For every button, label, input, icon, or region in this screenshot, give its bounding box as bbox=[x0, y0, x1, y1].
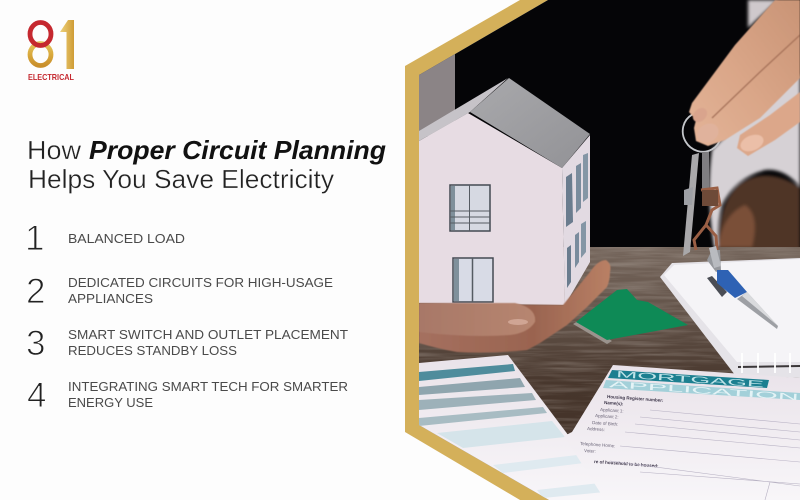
mortgage application form: MORTGAGE bbox=[616, 369, 764, 389]
list item 3: 3 bbox=[26, 324, 45, 363]
list item 2 bbox=[26, 272, 333, 311]
wooden table bbox=[419, 247, 800, 500]
list item 3 bbox=[26, 324, 348, 363]
heading: Helps You Save Electricity bbox=[28, 164, 334, 194]
heading bbox=[27, 135, 386, 194]
list item 1: 1 bbox=[25, 219, 44, 258]
white sleeve at right bbox=[709, 0, 800, 250]
mortgage application form: Date of Birth: bbox=[592, 420, 618, 427]
pen bbox=[707, 250, 778, 329]
key ring and keys bbox=[682, 114, 722, 268]
list item 2: 2 bbox=[26, 272, 45, 311]
house front wall bbox=[419, 113, 565, 305]
heading: How bbox=[27, 135, 81, 165]
mortgage application form bbox=[564, 365, 800, 500]
mortgage application form: Address: bbox=[587, 426, 605, 432]
logo: 81 Electrical: ELECTRICAL bbox=[28, 72, 74, 82]
mortgage application form: Housing Register number: bbox=[607, 394, 664, 403]
list item 1: BALANCED LOAD bbox=[68, 231, 185, 246]
mortgage application form: Name(s): bbox=[604, 400, 624, 406]
mortgage application form: Telephone Home: bbox=[580, 441, 615, 448]
front upper window bbox=[450, 185, 490, 231]
wood grain texture bbox=[419, 247, 800, 437]
thumbnail bbox=[508, 319, 528, 325]
house side wall bbox=[562, 135, 590, 305]
list item 2: APPLIANCES bbox=[68, 291, 153, 306]
blurred grey block at left bbox=[419, 50, 455, 136]
mortgage application form: re of household to be housed: bbox=[594, 459, 659, 469]
gold hexagon frame bbox=[405, 0, 549, 500]
roof left bbox=[419, 78, 508, 141]
list item 4: ENERGY USE bbox=[68, 395, 153, 410]
list item 1 bbox=[25, 219, 185, 258]
list item 4: 4 bbox=[27, 376, 46, 415]
list item 4: INTEGRATING SMART TECH FOR SMARTER bbox=[68, 379, 348, 394]
mortgage application form: APPLICATION bbox=[609, 379, 799, 402]
side windows bbox=[566, 153, 588, 288]
front lower window bbox=[453, 258, 493, 302]
list item 3: SMART SWITCH AND OUTLET PLACEMENT bbox=[68, 327, 348, 342]
list item 3: REDUCES STANDBY LOSS bbox=[68, 343, 237, 358]
house model bbox=[419, 78, 590, 305]
green paper house bbox=[573, 289, 688, 344]
mortgage application form: Voter: bbox=[584, 448, 596, 454]
logo: 81 Electrical bbox=[28, 20, 74, 82]
heading: Proper Circuit Planning bbox=[89, 135, 386, 165]
mortgage application form: Applicant 2: bbox=[595, 413, 619, 420]
list item 4 bbox=[27, 376, 348, 415]
list item 2: DEDICATED CIRCUITS FOR HIGH-USAGE bbox=[68, 275, 333, 290]
mortgage application form: Applicant 1: bbox=[600, 407, 624, 414]
thumb bbox=[419, 303, 535, 336]
hanging hand bbox=[689, 0, 800, 156]
roof main bbox=[470, 78, 590, 168]
hand holding house bbox=[419, 260, 610, 353]
left document bbox=[419, 355, 617, 500]
photo: house model, keys and documents bbox=[419, 0, 800, 500]
notebook bbox=[660, 258, 800, 378]
dark backdrop bbox=[419, 0, 800, 250]
